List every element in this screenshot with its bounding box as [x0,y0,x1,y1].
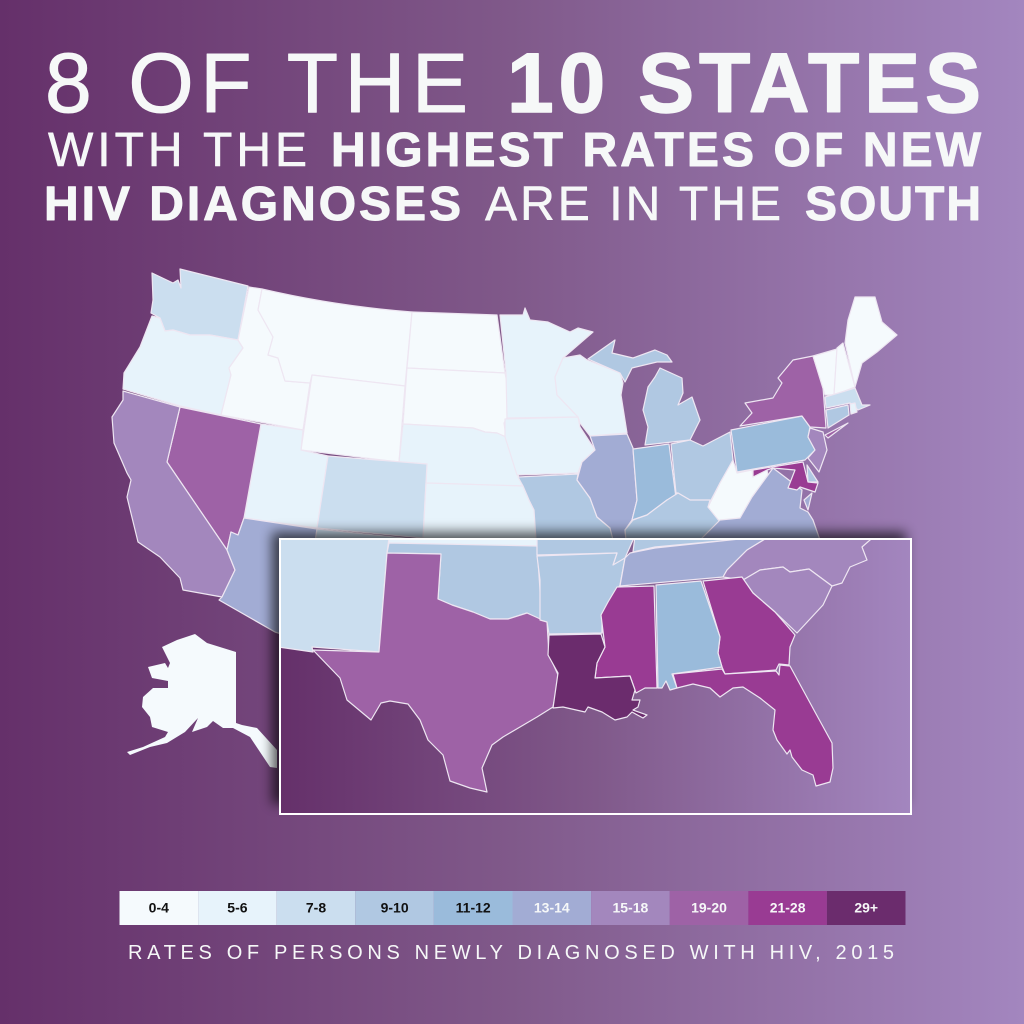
state: Kansas [423,483,537,546]
state: South Dakota [403,368,507,437]
state: Wyoming [301,375,405,462]
state: Oklahoma [387,543,541,620]
legend labels: 21-28 [770,900,806,916]
state: Vermont [813,349,837,395]
title: ARE IN THE [485,178,781,231]
state: Alabama [656,581,722,690]
state: Tennessee [620,540,762,586]
state: Michigan upper peninsula [588,340,672,382]
state: Pennsylvania [731,416,815,472]
state: North Dakota [407,312,505,373]
title: HIGHEST RATES OF NEW [331,124,982,177]
state: Massachusetts [825,388,870,410]
inset map [278,536,875,792]
state: New Mexico [278,538,389,652]
state: Colorado [317,456,427,538]
state: Texas [313,553,559,792]
state: Long Island [825,423,848,438]
state: Mississippi [595,586,657,693]
state: Oregon [123,316,243,415]
map: contiguous US upper states [112,269,897,768]
state: Kentucky [625,493,720,540]
state: Nevada [167,407,261,550]
legend labels: 5-6 [227,900,248,916]
legend labels: 11-12 [456,900,491,916]
state: Indiana [632,444,676,520]
legend labels [149,900,878,916]
title: 8 OF THE [45,36,468,130]
title: WITH THE [48,124,307,177]
state: Missouri inset [536,540,634,564]
state: New Hampshire [834,343,855,395]
state: New York [740,356,826,428]
state: Missouri [518,474,628,565]
legend swatches [120,891,906,925]
state: Iowa [505,417,595,475]
state: North Carolina [723,536,875,586]
legend labels: 19-20 [691,900,727,916]
inset border [280,539,911,814]
state: Delaware [807,465,818,482]
state: Alaska [127,634,277,768]
panel: South inset [278,536,911,815]
state: Maine [845,297,897,387]
state: Virginia eastern shore [804,493,812,510]
state: Utah [244,424,328,528]
state: Kentucky inset [632,540,724,552]
legend caption: RATES OF PERSONS NEWLY DIAGNOSED WITH HIV, 2015 [128,942,894,964]
state: Idaho [221,287,310,430]
state: Virginia [700,468,820,540]
legend labels: 29+ [854,900,878,916]
state: South Carolina [743,567,832,633]
state: Arkansas [537,553,625,634]
state: California [112,391,235,597]
state: Minnesota [500,308,593,418]
state: West Virginia [708,460,768,522]
state: Illinois [577,434,637,540]
state: Rhode Island [850,403,857,414]
state: Connecticut [826,405,849,428]
state: Wisconsin [555,355,627,436]
state: Louisiana [548,634,647,720]
inset background [280,540,911,815]
state: Kansas inset [389,540,536,546]
legend labels: 13-14 [534,900,570,916]
legend labels: 7-8 [306,900,326,916]
legend labels: 0-4 [149,900,169,916]
title [44,36,982,231]
title: HIV DIAGNOSES [44,178,461,231]
state: Michigan lower peninsula [643,368,700,445]
legend [120,891,906,925]
state: Nebraska [399,424,523,486]
title: SOUTH [805,178,981,231]
inset box shadow [272,532,906,804]
legend labels: 15-18 [612,900,649,916]
state: Montana [258,289,412,386]
state: Arizona [219,518,317,640]
state: Maryland [753,462,818,492]
title: 10 STATES [507,36,981,130]
state: Florida [673,665,833,786]
state: Ohio [671,432,733,502]
legend labels: 9-10 [381,900,409,916]
state: Washington [151,269,248,340]
state: New Jersey [808,428,827,472]
state: New Mexico upper [300,529,423,640]
state: Georgia [703,577,795,674]
